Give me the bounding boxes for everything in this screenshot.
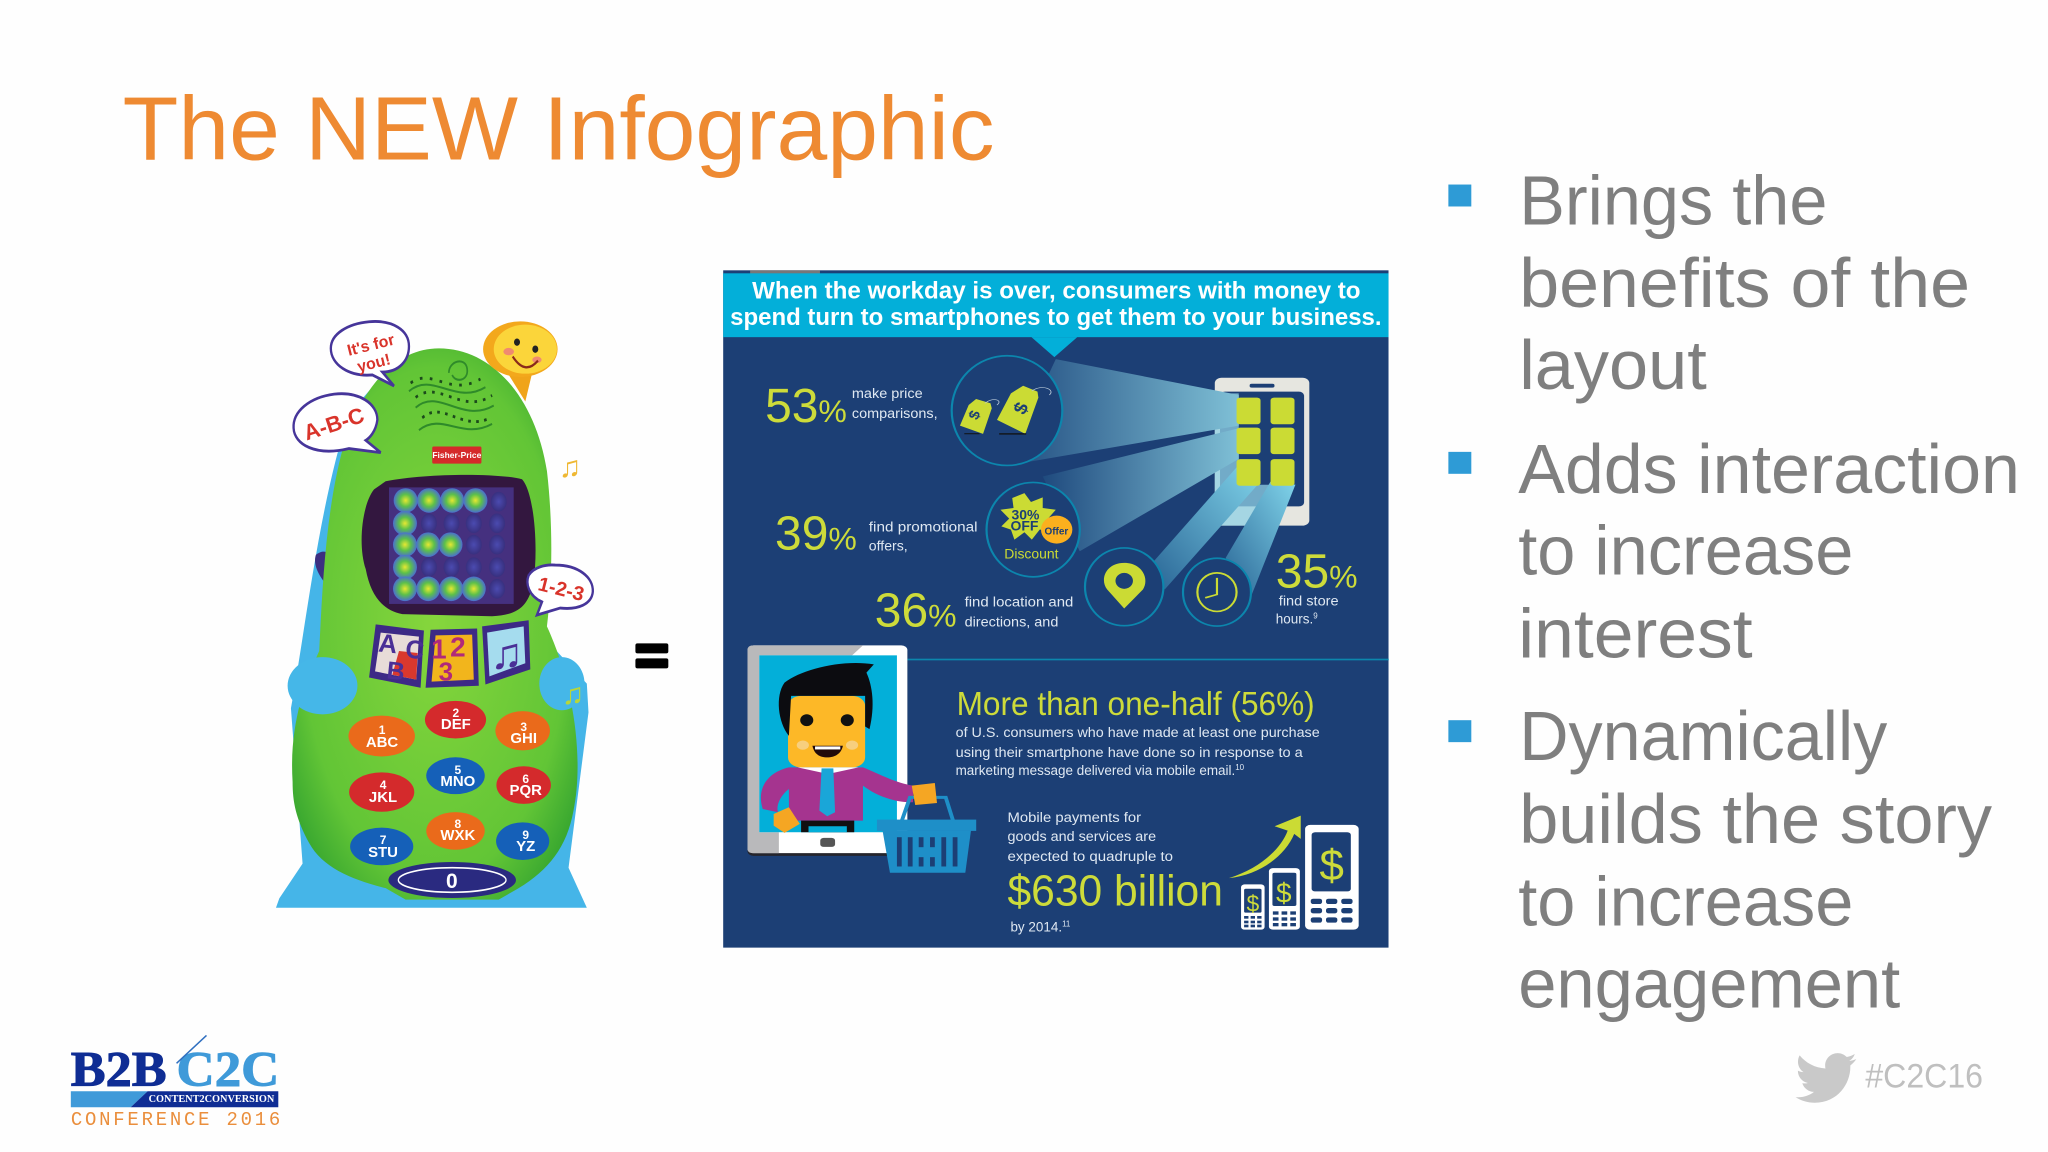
icon: tag strings	[985, 388, 1051, 405]
keypad labels: 9	[522, 828, 529, 842]
bubble text: It's for	[346, 332, 396, 360]
phone body	[1215, 378, 1309, 526]
paragraph: email purchases: marketing message delivered via mobile email.	[956, 763, 1235, 778]
function key text: C	[404, 635, 426, 665]
paragraph: mobile payments: by 2014.	[1010, 920, 1062, 935]
icon: price tags	[960, 386, 1038, 435]
bullet: benefits of layout	[1448, 161, 1970, 404]
speaker grill	[409, 361, 494, 430]
light beams	[1006, 359, 1239, 466]
tag dollar signs	[966, 399, 1034, 422]
tag dollar signs: $	[1010, 399, 1034, 418]
cash phone dollar signs: $	[1276, 878, 1292, 909]
bullet: interaction: Adds interaction	[1518, 430, 2020, 508]
bullet: benefits of layout: layout	[1519, 326, 1707, 404]
stat: 35%: 9	[1313, 611, 1318, 620]
logo wordmark: C2C	[177, 1041, 279, 1096]
function key text: 1	[431, 633, 447, 664]
bullet: interaction	[1448, 430, 2020, 672]
bullet: interaction: to increase	[1518, 512, 1853, 590]
hashtag with twitter bird: #C2C16	[1865, 1057, 1983, 1095]
stat: 53%	[765, 380, 938, 433]
stat: 35%: 35%	[1276, 546, 1358, 599]
keypad labels: 2	[453, 706, 460, 720]
hashtag with twitter bird	[1796, 1053, 1983, 1103]
stat: 35%	[1276, 546, 1358, 626]
conference logo	[71, 1035, 280, 1131]
icon: discount badge	[1000, 493, 1072, 544]
icon: map pin	[1104, 563, 1145, 608]
conference logo: CONTENT2CONVERSION	[149, 1094, 275, 1105]
header banner: When the workday is over, consumers with money to	[752, 277, 1361, 304]
paragraph: mobile payments: expected to quadruple to	[1007, 849, 1173, 864]
bubble text: you!	[356, 351, 392, 376]
function key text: 2	[450, 631, 466, 662]
icon: twitter bird	[1796, 1053, 1857, 1103]
discount text: Offer	[1044, 527, 1068, 538]
paragraph: email purchases: using their smartphone have done so in response to a	[956, 745, 1303, 760]
keypad labels: JKL	[369, 789, 397, 806]
cash phone dollar signs	[1246, 841, 1344, 917]
infographic panel	[723, 270, 1389, 948]
discount text	[1004, 507, 1068, 562]
function key text: ♫	[490, 629, 523, 678]
hands	[288, 657, 357, 714]
music notes: ♫	[559, 451, 581, 484]
function key text: 3	[439, 658, 453, 686]
conference logo: CONFERENCE 2016	[71, 1109, 280, 1131]
paragraph: mobile payments: goods and services are	[1007, 829, 1156, 844]
bullet: benefits of layout: benefits of the	[1519, 244, 1970, 322]
growth arrow	[1229, 816, 1301, 878]
keypad labels: ABC	[366, 734, 398, 751]
shopper in tablet illustration	[748, 645, 1389, 930]
paragraph: mobile payments: 11	[1062, 920, 1071, 929]
stat: 36%: 36%	[875, 584, 957, 637]
function key text	[377, 629, 523, 686]
cash phones	[1241, 825, 1359, 930]
stat: 35%: find store	[1279, 593, 1339, 608]
phone tint	[1215, 393, 1295, 526]
bubble text	[300, 332, 586, 606]
bubble text: Fisher-Price	[432, 450, 482, 460]
keypad labels: 6	[522, 772, 529, 786]
paragraph: mobile payments: $630 billion	[1007, 867, 1223, 916]
bullet: story: Dynamically	[1519, 697, 1887, 775]
panel background	[723, 270, 1389, 948]
bubble text: A-B-C	[300, 402, 367, 445]
bullet list	[1448, 161, 2020, 1022]
keypad labels: 5	[455, 763, 462, 777]
logo wordmark: B2B	[71, 1041, 167, 1096]
speech bubbles	[331, 321, 409, 386]
stat: 39%: 39%	[775, 508, 857, 561]
tag dollar signs: $	[966, 408, 985, 422]
bullet: story: to increase	[1518, 863, 1853, 941]
stat: 39%: offers,	[869, 539, 908, 554]
keypad labels: 4	[380, 778, 387, 792]
icon circles	[952, 356, 1251, 626]
keypad labels	[366, 706, 542, 893]
discount text: Discount	[1004, 546, 1059, 562]
keypad labels: GHI	[510, 730, 537, 747]
icon: clock	[1197, 573, 1237, 611]
stat: 53%: make price	[852, 386, 923, 401]
stat: 36%: find location and	[965, 594, 1073, 609]
stat: 53%: comparisons,	[852, 406, 938, 421]
keypad labels: MNO	[440, 773, 475, 790]
tablet	[748, 647, 907, 856]
stat: 36%: directions, and	[965, 614, 1058, 629]
LED matrix	[421, 492, 507, 599]
bullet: story	[1448, 697, 1992, 1022]
bullet: interaction: interest	[1518, 594, 1753, 672]
function keys	[369, 624, 424, 688]
keypad labels: STU	[368, 844, 398, 861]
logo wordmark	[71, 1041, 279, 1096]
smartphone with light beams	[952, 356, 1309, 626]
man	[761, 663, 913, 833]
keypad labels: PQR	[509, 782, 542, 799]
keypad ovals	[348, 701, 551, 898]
keypad labels: 7	[380, 833, 387, 847]
title: The NEW Infographic	[123, 80, 995, 180]
stat: 36%	[875, 584, 1073, 637]
bullet: benefits of layout: Brings the	[1519, 161, 1827, 239]
heading: more than one-half: More than one-half (56%)	[957, 685, 1315, 722]
cash phone dollar signs: $	[1319, 841, 1344, 890]
paragraph: email purchases: of U.S. consumers who have made at least one purchase	[956, 725, 1320, 740]
stat: 39%: find promotional	[869, 520, 978, 535]
top image sliver	[750, 270, 820, 274]
keypad labels: 8	[455, 817, 462, 831]
discount text: OFF	[1010, 518, 1039, 534]
keypad labels: 1	[379, 723, 386, 737]
paragraph: email purchases: 10	[1235, 763, 1245, 772]
music notes: ♫	[562, 678, 584, 711]
header banner: spend turn to smartphones to get them to your business.	[730, 304, 1382, 331]
function key text: A	[377, 630, 399, 659]
stat: 35%: hours.	[1276, 611, 1313, 626]
toy phone illustration	[276, 321, 593, 908]
keypad labels: 3	[520, 720, 527, 734]
stat: 53%: 53%	[765, 380, 847, 433]
keypad labels: DEF	[441, 716, 471, 733]
smiley antenna	[504, 367, 534, 401]
screen	[362, 475, 536, 616]
bullet: story: builds the story	[1519, 780, 1992, 858]
paragraph: mobile payments	[1007, 810, 1223, 935]
stat: 39%	[775, 508, 978, 561]
toy phone body	[276, 321, 593, 908]
paragraph: mobile payments: Mobile payments for	[1007, 810, 1142, 825]
cash phone dollar signs: $	[1246, 891, 1259, 917]
header banner	[723, 273, 1389, 357]
app tiles	[1237, 398, 1295, 486]
function key text: B	[385, 656, 406, 686]
discount text: 30%	[1011, 507, 1040, 523]
music notes	[559, 451, 584, 711]
keypad labels: YZ	[516, 838, 535, 855]
keypad labels: WXK	[440, 827, 475, 844]
paragraph: email purchases	[956, 725, 1320, 778]
basket	[877, 783, 976, 873]
bubble text: 1-2-3	[536, 573, 586, 606]
keypad labels: 0	[446, 870, 458, 893]
logo plate	[432, 446, 481, 464]
bullet: story: engagement	[1518, 944, 1900, 1022]
equals sign	[635, 643, 668, 668]
